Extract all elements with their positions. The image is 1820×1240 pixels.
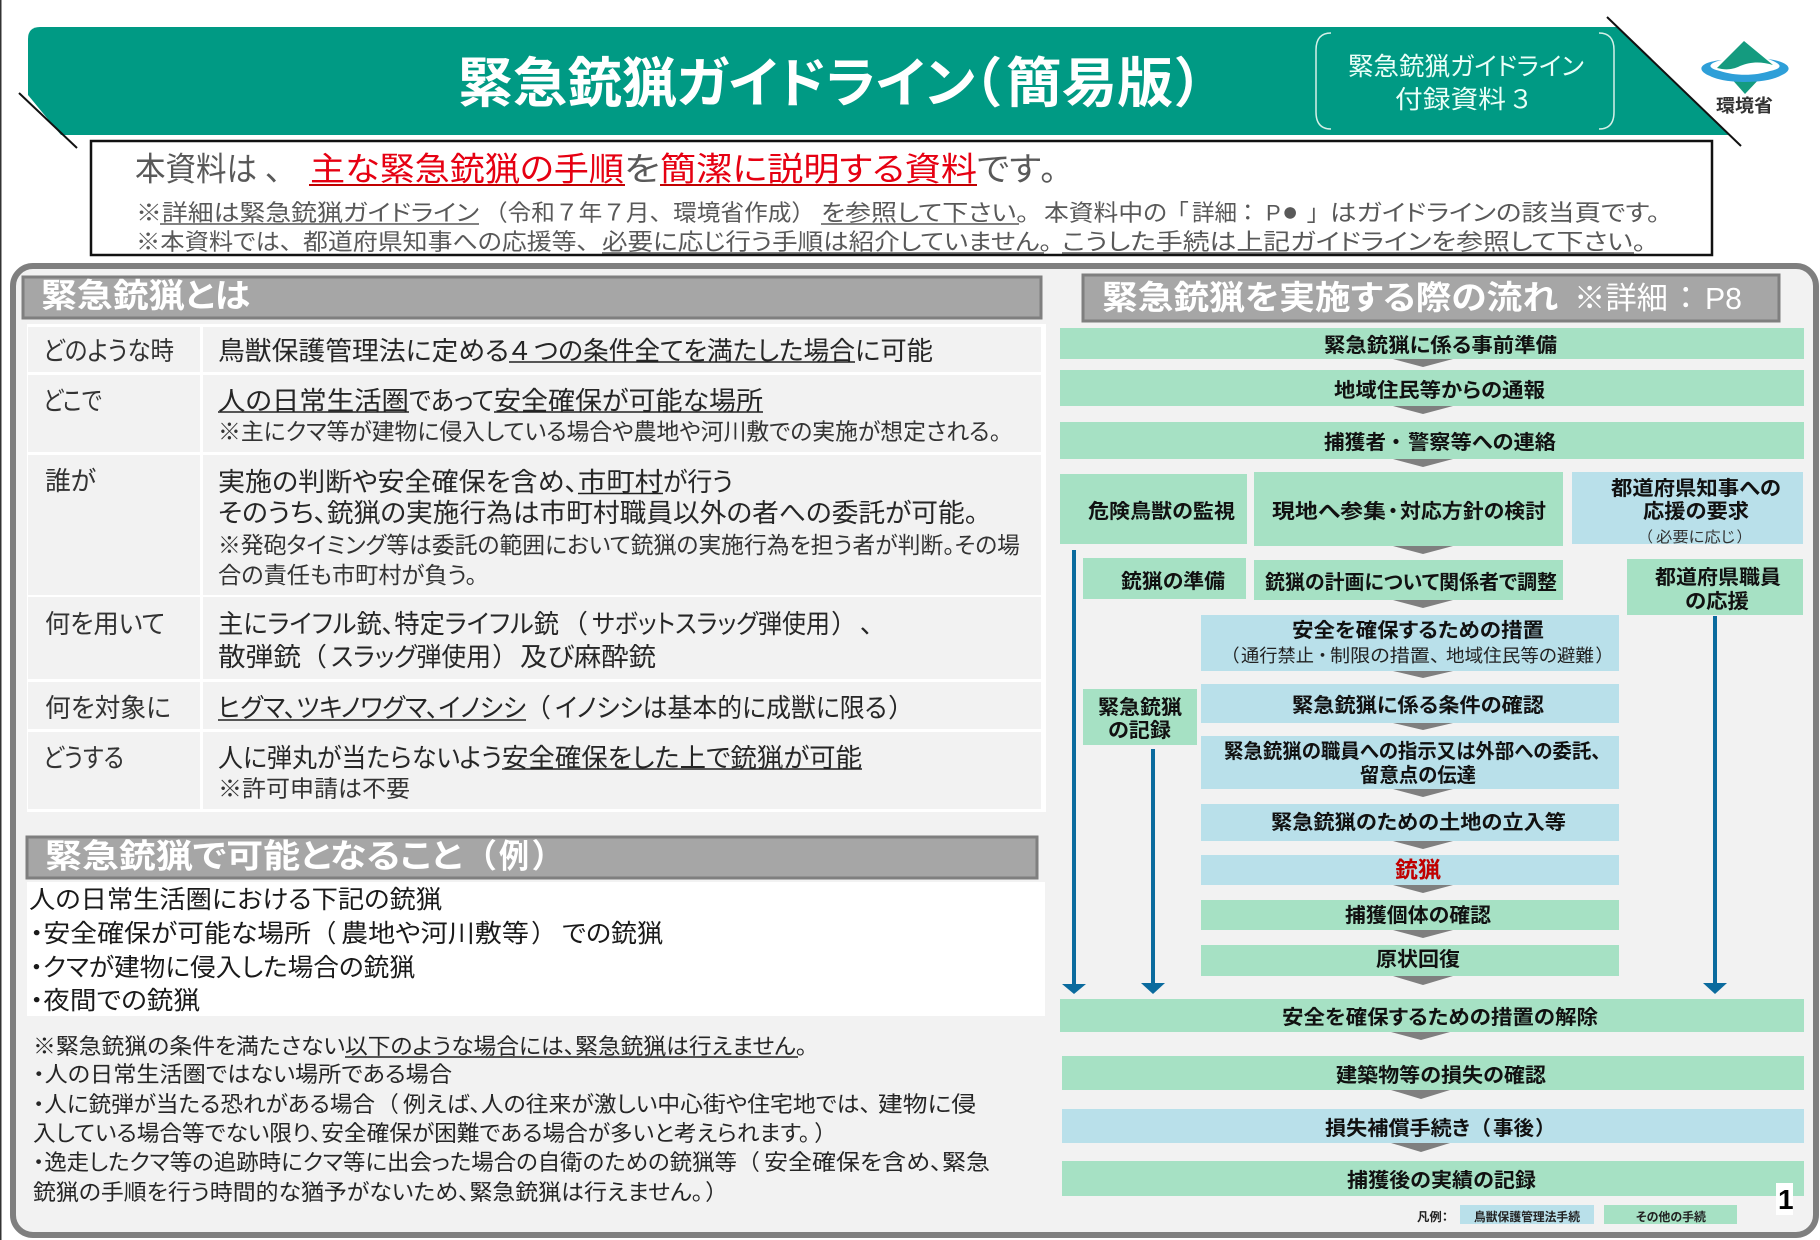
row: who: が行う (663, 467, 733, 497)
step: confirm conditions: 緊急銃猟に係る条件の確認 (1292, 694, 1544, 717)
step: report from residents: 地域住民等からの通報 (1334, 379, 1545, 402)
step: assemble on site: ・ (1388, 501, 1398, 523)
step: instruct staff (1201, 736, 1619, 789)
row: how: どうする (43, 743, 124, 773)
row: with what: （ (313, 642, 326, 672)
legend: その他の手続 (1636, 1209, 1706, 1224)
step: lift safety measures (1060, 999, 1804, 1032)
step: advance preparation: 緊急銃猟に係る事前準備 (1324, 334, 1557, 357)
intro box: 簡潔に説明する資料 (660, 150, 977, 188)
step: record results (1062, 1161, 1804, 1196)
row: with what: 何を用いて (45, 609, 165, 639)
intro box: 本資料中の (1044, 200, 1167, 226)
exclusion notes: ・人に銃弾が当たる恐れがある場合 (33, 1092, 375, 1117)
intro box: を参照して下さい。 (821, 200, 1029, 226)
step: report from residents (1060, 370, 1804, 406)
row: target: （ (537, 693, 550, 723)
heading (27, 837, 1037, 878)
examples list: ・安全確保が可能な場所 (30, 920, 311, 948)
step: contact hunters and police (1060, 422, 1804, 459)
row: when: ４ (510, 336, 530, 366)
step: safety measures: 安全を確保するための措置 (1292, 619, 1544, 642)
arrow: record continues (1141, 749, 1165, 994)
step: assemble on site (1254, 472, 1563, 546)
exclusion notes: ※緊急銃猟の条件を満たさない (33, 1034, 345, 1059)
heading (1083, 275, 1779, 321)
appendix tag: ３ (1511, 86, 1530, 114)
step: instruct staff: 緊急銃猟の職員への指示又は外部への委託、 (1224, 740, 1601, 763)
step: request to governor: ） (1736, 529, 1745, 546)
heading: ※詳細 (1574, 281, 1668, 316)
step: request to governor: （ (1645, 529, 1653, 546)
row: who: ※発砲タイミング等は委託の範囲において銃猟の実施行為を担う者が判断。その場 (218, 532, 1020, 558)
title banner (19, 17, 1741, 148)
examples list: 農地や河川敷等 (341, 920, 529, 948)
intro box: ※詳細は緊急銃猟ガイドライン (136, 200, 479, 226)
step: request to governor: 応援の要求 (1643, 500, 1749, 523)
step: contact hunters and police: ・ (1391, 432, 1401, 454)
examples list: ） (532, 920, 545, 948)
page number: 1 (1778, 1184, 1794, 1215)
row: how: 安全確保をした上で銃猟が可能 (502, 743, 862, 773)
step: safety measures: 地域住民等の避難 (1446, 646, 1594, 666)
row: when: つの条件全てを満たした場合 (534, 336, 855, 366)
step: monitoring: 危険鳥獣の監視 (1088, 499, 1235, 523)
row: target (28, 682, 1041, 729)
row: how (28, 732, 1041, 809)
row: where (28, 375, 1041, 452)
title: ） (1176, 54, 1203, 114)
row: who: そのうち、銃猟の実施行為は市町村職員以外の者への委託が可能。 (218, 498, 978, 528)
step: safety measures: 制限の措置、 (1330, 646, 1440, 666)
step: confirm captured animal (1201, 900, 1619, 930)
exclusion notes (33, 1034, 990, 1205)
step: shooting record (1083, 689, 1197, 745)
row: with what: 及び麻酔銃 (520, 642, 656, 672)
intro box: 都道府県知事への応援等、 (303, 228, 589, 254)
row: target: イノシシは基本的に成獣に限る (555, 693, 887, 723)
heading: ： (1678, 281, 1694, 316)
intro box: （令和７年７月、環境省作成） (484, 200, 815, 226)
step: compensation: 損失補償手続き (1325, 1117, 1470, 1140)
icon: Ministry of the Environment logo: 環境省 (1716, 96, 1773, 116)
arrow: monitoring continues (1062, 550, 1086, 994)
heading: ） (533, 838, 550, 874)
appendix tag (1316, 33, 1614, 129)
title (458, 54, 1203, 114)
step: safety measures: （ (1230, 646, 1240, 666)
row: with what: ） (832, 609, 845, 639)
intro box: 「 (1177, 200, 1189, 226)
row: when: に可能 (855, 336, 933, 366)
step: contact hunters and police: 捕獲者 (1324, 431, 1386, 454)
step: confirm building damage: 建築物等の損失の確認 (1336, 1064, 1546, 1087)
step: assemble on site: 対応方針の検討 (1400, 500, 1546, 523)
examples list: ・クマが建物に侵入した場合の銃猟 (30, 954, 415, 982)
row: who (28, 455, 1041, 595)
step: record results: 捕獲後の実績の記録 (1347, 1169, 1536, 1192)
section: what is emergency shooting (23, 277, 1046, 812)
intro box: です (977, 150, 1041, 188)
row: how: 人に弾丸が当たらないよう (218, 743, 502, 773)
step: shooting preparation (1083, 558, 1246, 599)
title: 簡易版 (1006, 54, 1173, 114)
row: when: 鳥獣保護管理法に定める (218, 336, 509, 366)
step: request to governor: 都道府県知事への (1611, 477, 1781, 500)
row: with what: ） (493, 642, 506, 672)
row: with what: （ (574, 609, 587, 639)
arrows between steps (1391, 359, 1453, 1152)
step: lift safety measures: 安全を確保するための措置の解除 (1282, 1006, 1598, 1029)
row: with what: 、 (860, 609, 873, 639)
step: shooting record: 緊急銃猟 (1098, 696, 1182, 719)
row: where: ※主にクマ等が建物に侵入している場合や農地や河川敷での実施が想定される。 (218, 418, 1001, 444)
exclusion notes: （ (387, 1092, 398, 1117)
row: who: 市町村 (578, 467, 663, 497)
step: shooting preparation: 銃猟の準備 (1121, 570, 1225, 593)
step: contact hunters and police: 警察等への連絡 (1408, 430, 1556, 454)
intro box: ： (1242, 200, 1254, 226)
row: target: 何を対象に (45, 693, 171, 723)
step: assemble on site: 現地へ参集 (1272, 500, 1386, 523)
heading: 例 (499, 838, 529, 874)
heading: P8 (1705, 281, 1742, 316)
exclusion notes: 以下のような場合には、緊急銃猟は行えません。 (345, 1034, 807, 1059)
row: with what: 主にライフル銃、特定ライフル銃 (218, 609, 559, 639)
intro box: 、 (265, 150, 282, 188)
examples list: ・夜間での銃猟 (30, 987, 200, 1015)
heading: 緊急銃猟とは (41, 277, 250, 314)
exclusion notes: ・逸走したクマ等の追跡時にクマ等に出会った場合の自衛のための銃猟等 (33, 1150, 737, 1175)
examples list (27, 882, 1045, 1016)
intro box: 本資料は (135, 150, 257, 188)
exclusion notes: 銃猟の手順を行う時間的な猶予がないため、緊急銃猟は行えません。 (33, 1180, 703, 1205)
intro box: 主な緊急銃猟の手順 (310, 150, 624, 188)
legend (1417, 1205, 1737, 1224)
row: with what (28, 597, 1041, 679)
row: where: どこで (43, 386, 102, 416)
main panel (13, 266, 1816, 1235)
flow chart (1060, 275, 1804, 1224)
legend: 鳥獣保護管理法手続 (1474, 1209, 1580, 1224)
step: advance preparation (1060, 328, 1804, 359)
section: what becomes possible (27, 837, 1045, 1205)
step: safety measures: 通行禁止 (1241, 646, 1314, 666)
appendix tag: 付録資料 (1395, 86, 1506, 114)
row: where: 安全確保が可能な場所 (494, 386, 763, 416)
step: prefectural staff support: 都道府県職員 (1655, 566, 1781, 589)
intro box: ● (1282, 196, 1298, 226)
heading: 緊急銃猟を実施する際の流れ (1102, 279, 1558, 316)
step: compensation: 事後 (1493, 1117, 1534, 1140)
step: confirm conditions (1201, 684, 1619, 723)
legend: 凡例： (1417, 1210, 1448, 1224)
arrow: prefectural support continues (1703, 616, 1727, 994)
row: where: 人の日常生活圏 (218, 386, 409, 416)
row: how: ※許可申請は不要 (218, 776, 410, 802)
heading: 緊急銃猟で可能となること (45, 838, 462, 874)
row: when (28, 327, 1041, 372)
step: shooting: 銃猟 (1395, 858, 1441, 882)
intro box: ※本資料では、 (136, 228, 292, 254)
intro box: こうした手続は上記ガイドラインを参照して下さい。 (1062, 228, 1646, 254)
icon: Ministry of the Environment logo (1701, 41, 1789, 116)
exclusion notes: 安全確保を含め、緊急 (764, 1150, 990, 1175)
intro box: 詳細 (1192, 200, 1237, 226)
intro box: P (1266, 200, 1281, 226)
step: shooting record: の記録 (1108, 719, 1171, 742)
step: compensation: （ (1480, 1117, 1491, 1140)
step: coordinate plan: 銃猟の計画について関係者で調整 (1265, 571, 1557, 594)
row: when: どのような時 (43, 336, 174, 366)
intro box: はガイドラインの該当頁です。 (1330, 200, 1660, 226)
intro box: 。 (1040, 150, 1056, 188)
intro box: を (624, 150, 660, 188)
step: confirm building damage (1062, 1056, 1804, 1090)
step: safety measures: ・ (1318, 646, 1327, 666)
row: target: ヒグマ、ツキノワグマ、イノシシ (218, 693, 526, 723)
step: land entry: 緊急銃猟のための土地の立入等 (1271, 811, 1566, 834)
exclusion notes: 入している場合等でない限り、安全確保が困難である場合が多いと考えられます。 (33, 1121, 810, 1146)
row: target: ） (889, 693, 902, 723)
examples list: （ (323, 920, 336, 948)
intro box: 」 (1307, 200, 1318, 226)
heading (23, 277, 1041, 318)
row: who: 実施の判断や安全確保を含め、 (218, 467, 578, 497)
step: prefectural staff support (1627, 559, 1803, 615)
exclusion notes: 建物に侵 (878, 1092, 976, 1117)
step: land entry (1201, 804, 1619, 841)
step: request to governor (1572, 472, 1803, 546)
examples list: での銃猟 (562, 920, 663, 948)
step: confirm captured animal: 捕獲個体の確認 (1345, 904, 1491, 927)
intro box: 必要に応じ行う手順は紹介していません。 (602, 228, 1052, 254)
exclusion notes: （ (748, 1150, 759, 1175)
title: 緊急銃猟ガイドライン (458, 54, 975, 114)
exclusion notes: ） (815, 1121, 826, 1146)
step: compensation (1062, 1109, 1804, 1143)
step: safety measures: ） (1595, 646, 1605, 666)
row: with what: 散弾銃 (218, 642, 301, 672)
step: request to governor: 必要に応じ (1656, 529, 1735, 546)
examples list: 人の日常生活圏における下記の銃猟 (29, 886, 442, 914)
title: （ (973, 54, 1000, 114)
step: coordinate plan (1254, 560, 1563, 600)
row: with what: スラッグ弾使用 (331, 642, 491, 672)
step: restoration (1201, 945, 1619, 976)
row: who: 誰が (45, 466, 96, 496)
step: compensation: ） (1535, 1117, 1546, 1140)
step: safety measures (1201, 615, 1619, 671)
step: monitoring (1060, 474, 1247, 544)
exclusion notes: ・人の日常生活圏ではない場所である場合 (33, 1062, 452, 1087)
exclusion notes: ） (706, 1180, 717, 1205)
exclusion notes: 例えば、人の往来が激しい中心街や住宅地では、 (403, 1092, 871, 1117)
step: shooting (1201, 855, 1619, 885)
step: restoration: 原状回復 (1376, 948, 1460, 971)
appendix tag: 緊急銃猟ガイドライン (1348, 53, 1584, 81)
row: with what: サボットスラッグ弾使用 (592, 609, 830, 639)
step: prefectural staff support: の応援 (1685, 590, 1749, 613)
row: who: 合の責任も市町村が負う。 (218, 562, 477, 588)
row: where: であって (409, 386, 494, 416)
heading: （ (479, 838, 496, 874)
step: instruct staff: 留意点の伝達 (1360, 764, 1476, 787)
intro box (91, 141, 1712, 255)
